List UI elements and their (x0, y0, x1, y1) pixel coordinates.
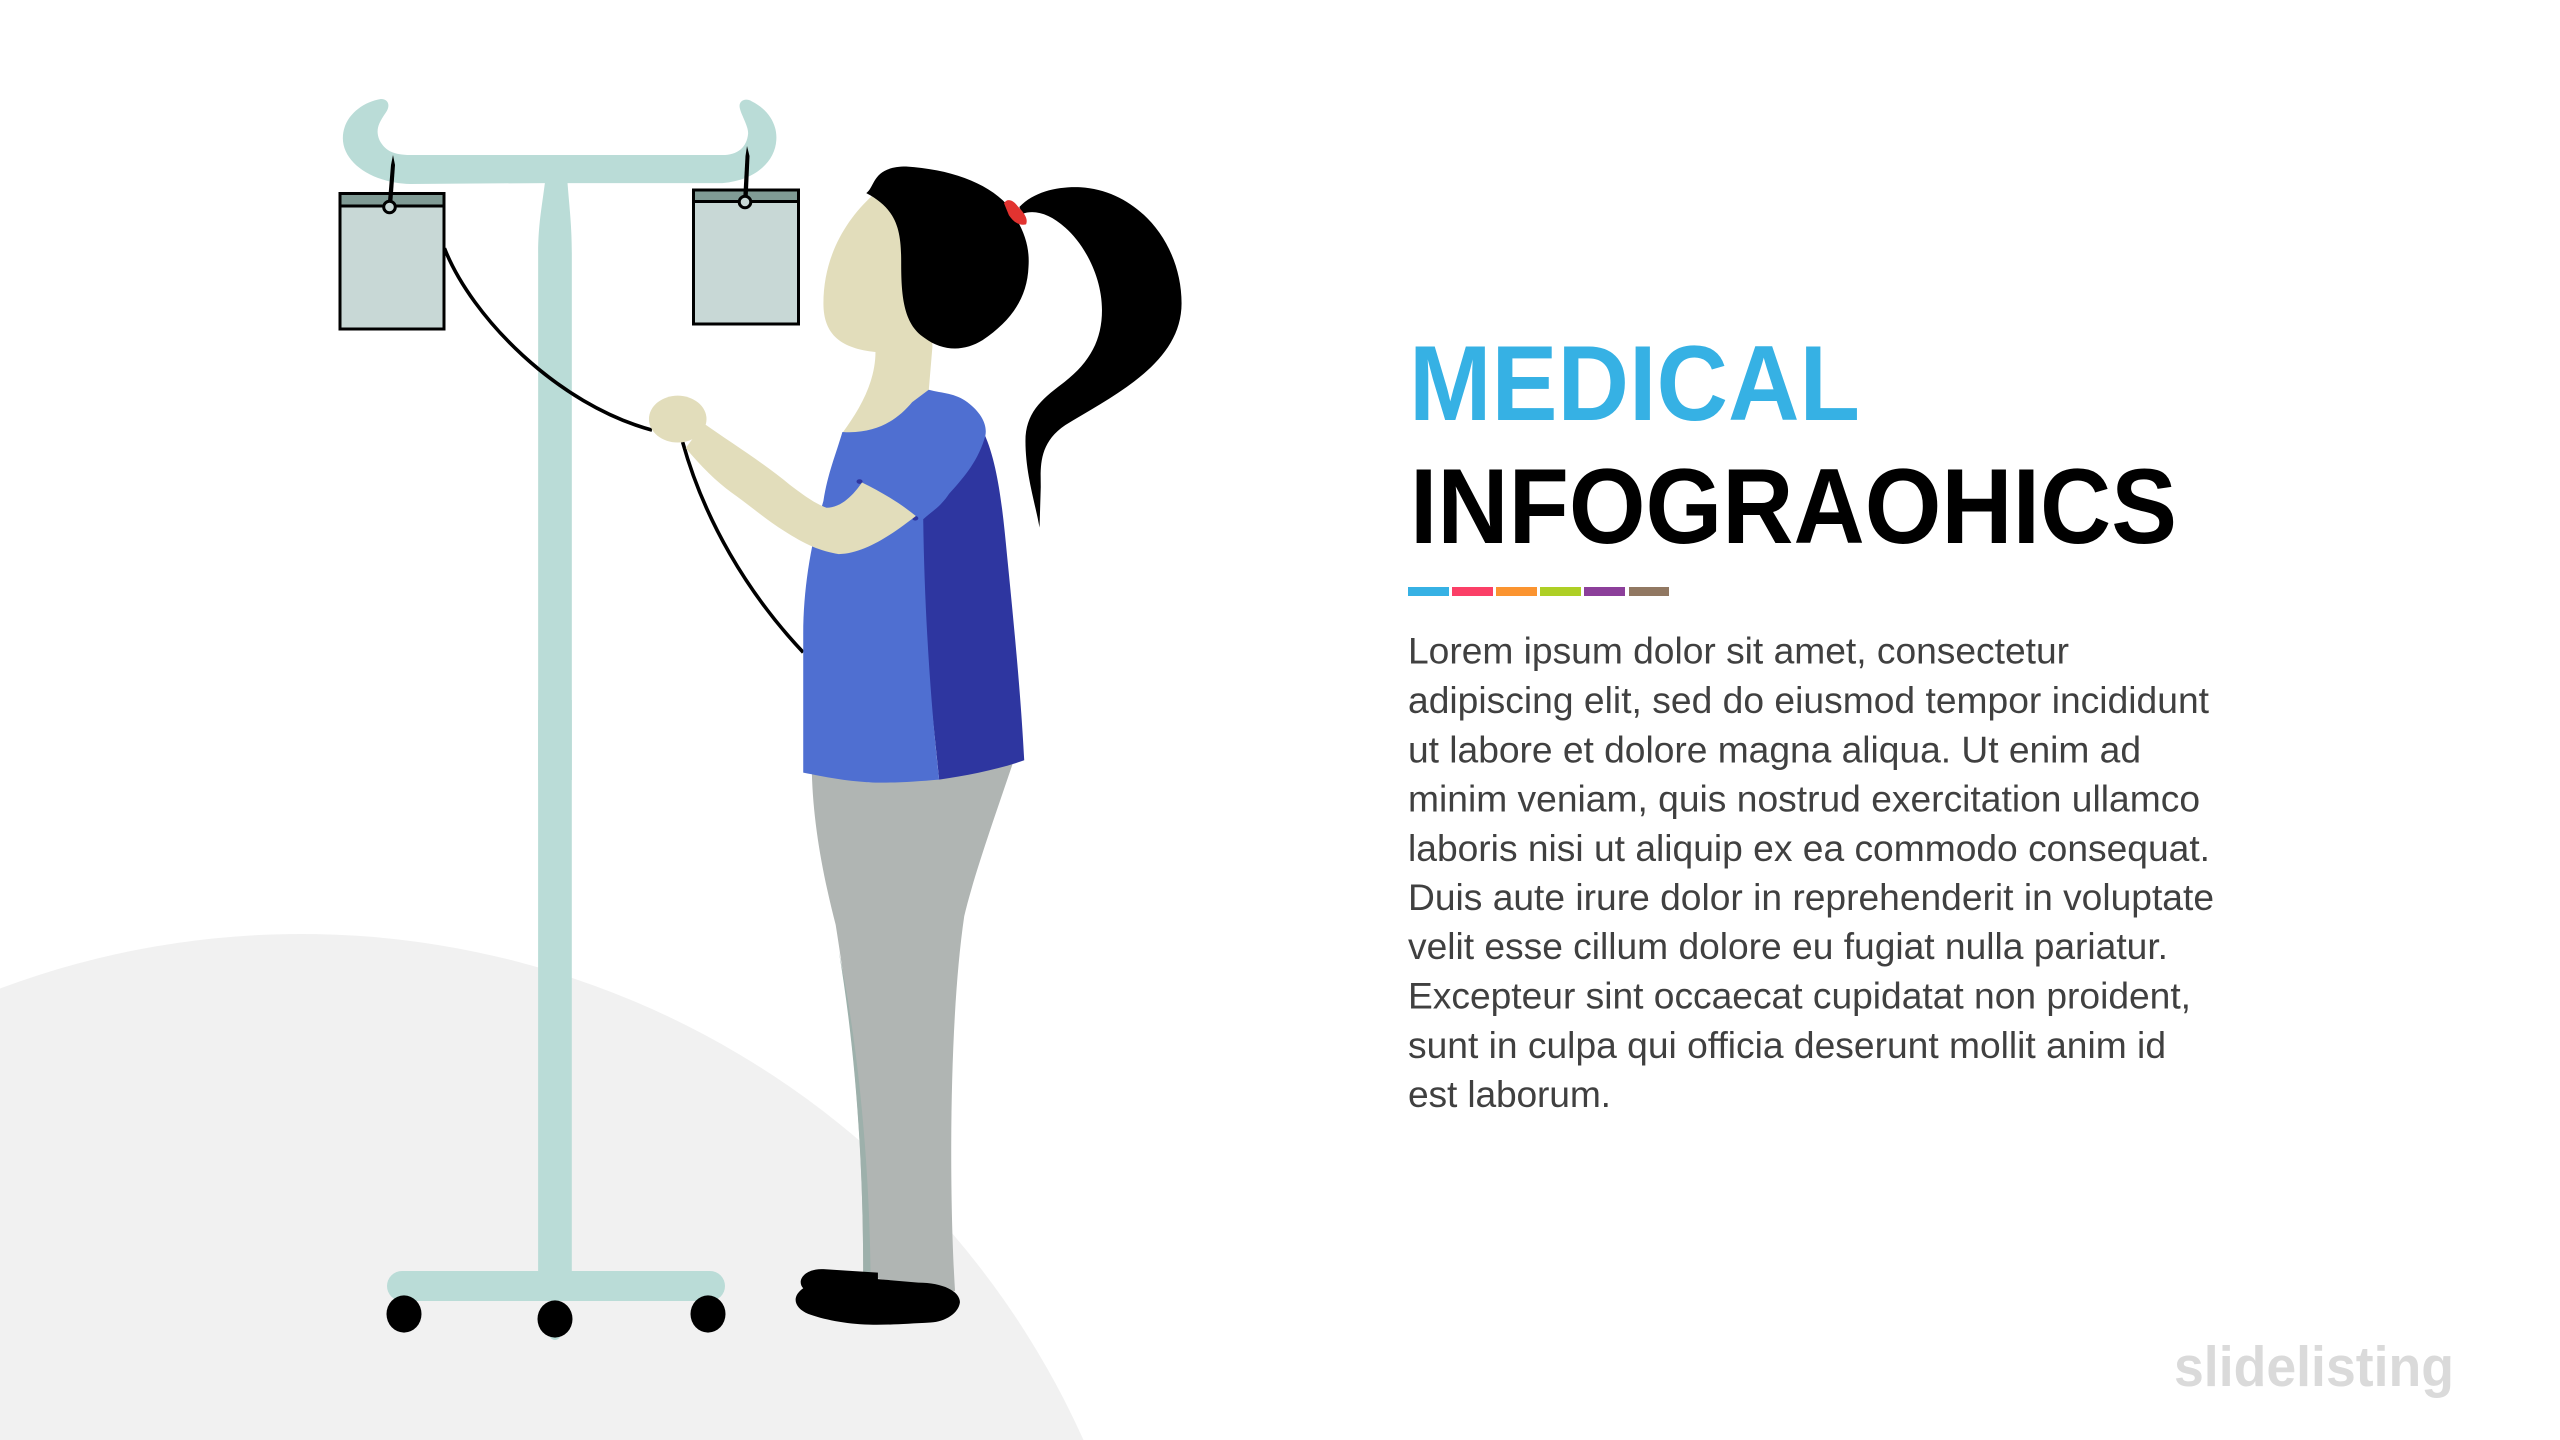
hair (866, 167, 1029, 348)
body text: laboris nisi ut aliquip ex ea commodo consequat. (1408, 827, 2210, 869)
body text: velit esse cillum dolore eu fugiat nulla pariatur. (1408, 925, 2168, 967)
figure: woman (649, 167, 1182, 1325)
body text: adipiscing elit, sed do eiusmod tempor incididunt (1408, 679, 2210, 721)
pole base (387, 1271, 725, 1301)
IV pole stand (343, 99, 776, 1340)
pole tail below centre wheel (548, 1320, 562, 1340)
hand (649, 396, 707, 443)
title line 2: INFOGRAOHICS (1410, 446, 2177, 566)
shoe (796, 1269, 960, 1325)
shirt front (803, 390, 986, 783)
background circle (0, 934, 1084, 1440)
IV bag right (694, 146, 798, 324)
tube from left bag to hand (444, 248, 652, 430)
title (1409, 323, 2177, 566)
body text: sunt in culpa qui officia deserunt mollit anim id (1408, 1024, 2166, 1066)
wheels (386, 1295, 726, 1338)
body text: Excepteur sint occaecat cupidatat non proident, (1408, 974, 2191, 1016)
pole crossbar with hooks (343, 99, 776, 780)
title line 1: MEDICAL (1409, 323, 1860, 443)
body text: Lorem ipsum dolor sit amet, consectetur (1408, 630, 2069, 672)
body text: minim veniam, quis nostrud exercitation ullamco (1408, 778, 2200, 820)
arm (686, 424, 916, 554)
watermark: slidelisting (2174, 1335, 2454, 1399)
legs (812, 762, 1013, 1291)
ponytail (1019, 187, 1182, 527)
pole shaft (538, 700, 572, 1290)
sleeve details (856, 479, 918, 521)
shirt shaded back (912, 434, 1024, 780)
hair tie (1004, 200, 1027, 225)
head and neck (823, 193, 932, 443)
tube from hand to body (683, 442, 803, 652)
colour bar divider (1408, 587, 1669, 596)
IV bag left (340, 155, 444, 329)
body text (1408, 630, 2214, 1115)
body text: ut labore et dolore magna aliqua. Ut enim ad (1408, 728, 2141, 770)
body text: est laborum. (1408, 1073, 1611, 1115)
body text: Duis aute irure dolor in reprehenderit in voluptate (1408, 876, 2214, 918)
